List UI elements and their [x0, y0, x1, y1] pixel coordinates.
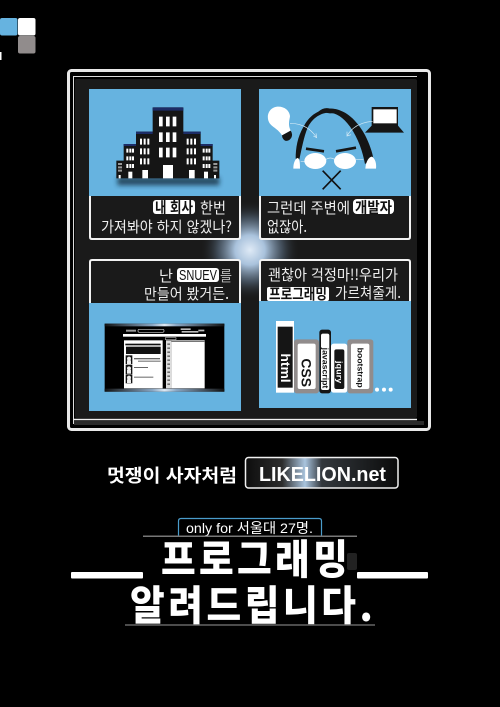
tagline: 멋쟁이 사자처럼: [107, 462, 237, 488]
highlighted word: SNUEV: [179, 268, 217, 284]
light bulb: [268, 107, 292, 141]
caption text: 만들어 봤거든.: [144, 283, 229, 304]
shadow block beside title: [347, 553, 357, 570]
book: jquery: jqury: [335, 360, 345, 384]
caption box: [90, 260, 240, 303]
book: bootstrap: bootstrap: [355, 348, 365, 388]
laptop: [365, 107, 404, 133]
book: javascript: javascript: [320, 347, 330, 388]
tab: only for: only for 서울대 27명.: [186, 520, 313, 536]
caption text: [144, 265, 232, 304]
title side bars: [71, 572, 428, 578]
icon: books: [276, 321, 393, 393]
main frame: [68, 70, 430, 430]
panel: company question: [89, 89, 241, 239]
rule above title: [143, 536, 357, 537]
icon: worried man with bulb and laptop: [268, 107, 404, 189]
caption box: [260, 196, 410, 239]
panel: we will teach programming: [259, 260, 411, 408]
title: 알려드립니다.: [130, 573, 373, 632]
website screenshot: [105, 324, 224, 392]
arrows: [290, 121, 373, 138]
caption text: 한번: [200, 197, 226, 218]
caption text: 가져봐야 하지 않겠나?: [101, 216, 232, 237]
caption text: 괜찮아 걱정마!!우리가: [268, 264, 398, 285]
caption text: 난: [159, 265, 173, 286]
panel: no developers around: [259, 89, 411, 239]
highlighted word: 프로그래밍: [269, 283, 327, 304]
highlighted word: 내 회사: [155, 196, 193, 218]
title: 프로그래밍: [161, 527, 348, 586]
ellipsis dots: [375, 388, 393, 392]
caption text: 없잖아.: [267, 216, 307, 237]
icon: office buildings: [116, 107, 219, 185]
caption text: 를: [220, 265, 232, 286]
panel: made SNUEV: [89, 260, 241, 411]
caption text: [101, 197, 232, 237]
title: [130, 527, 373, 632]
caption box: [90, 196, 240, 239]
website button: [246, 458, 398, 488]
book: css: CSS: [299, 358, 315, 387]
corner logo squares: [0, 18, 36, 60]
rule below title: [125, 624, 375, 626]
hair and head: [293, 108, 376, 189]
website button: LIKELION.net: [259, 464, 386, 486]
caption text: 가르쳐줄게.: [335, 282, 401, 303]
highlighted word: 개발자: [355, 196, 392, 218]
caption text: 그런데 주변에: [267, 197, 350, 218]
caption box: [260, 260, 410, 301]
book: html: html: [278, 353, 293, 383]
